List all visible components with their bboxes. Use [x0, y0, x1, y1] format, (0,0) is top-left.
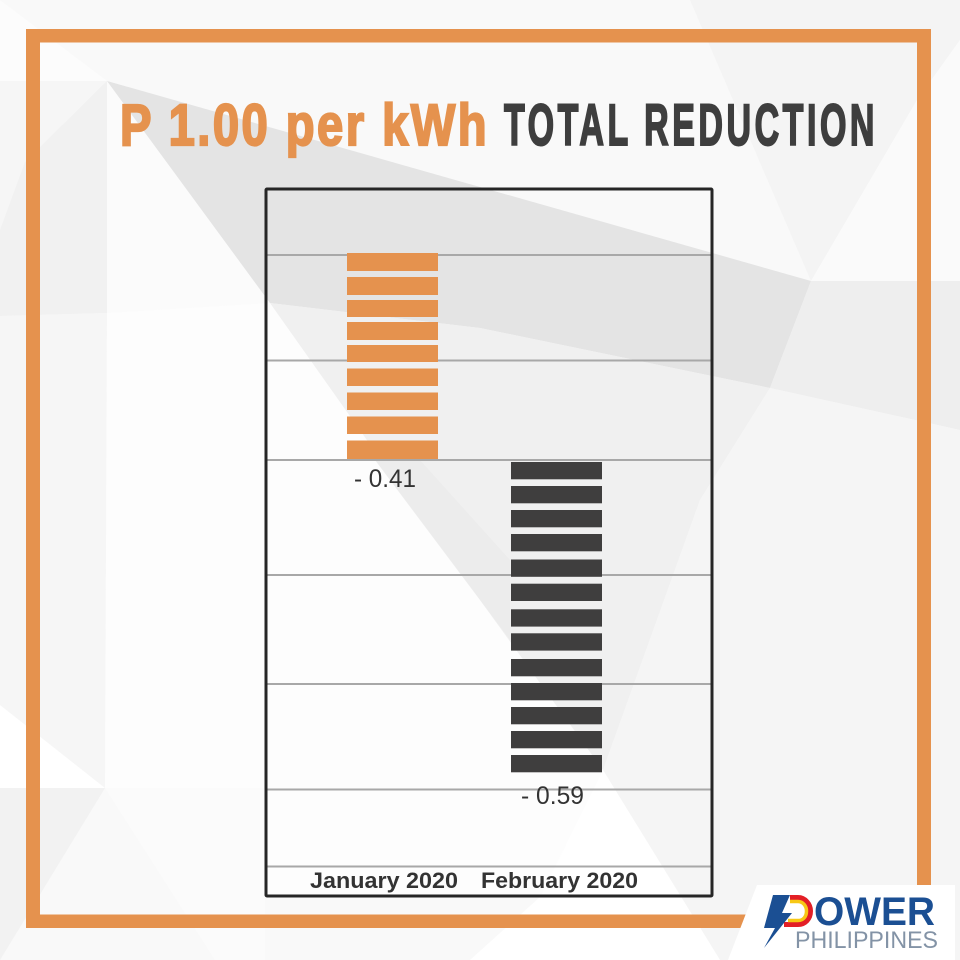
value: January: - 0.41	[354, 465, 416, 493]
logo: Power Philippines	[728, 885, 955, 960]
icon: lightning bolt and D	[764, 895, 810, 948]
title	[120, 93, 878, 158]
axis label: January 2020: January 2020	[310, 868, 458, 893]
logo word: OWER: OWER	[814, 890, 935, 934]
bar: January 2020	[347, 253, 438, 459]
logo word: PHILIPPINES: PHILIPPINES	[795, 927, 938, 954]
value: February: - 0.59	[521, 782, 584, 810]
title: orange part: P 1.00 per kWh	[120, 93, 489, 158]
axis label: February 2020: February 2020	[481, 868, 638, 893]
bar: February 2020	[511, 462, 602, 772]
bar chart	[266, 189, 712, 896]
